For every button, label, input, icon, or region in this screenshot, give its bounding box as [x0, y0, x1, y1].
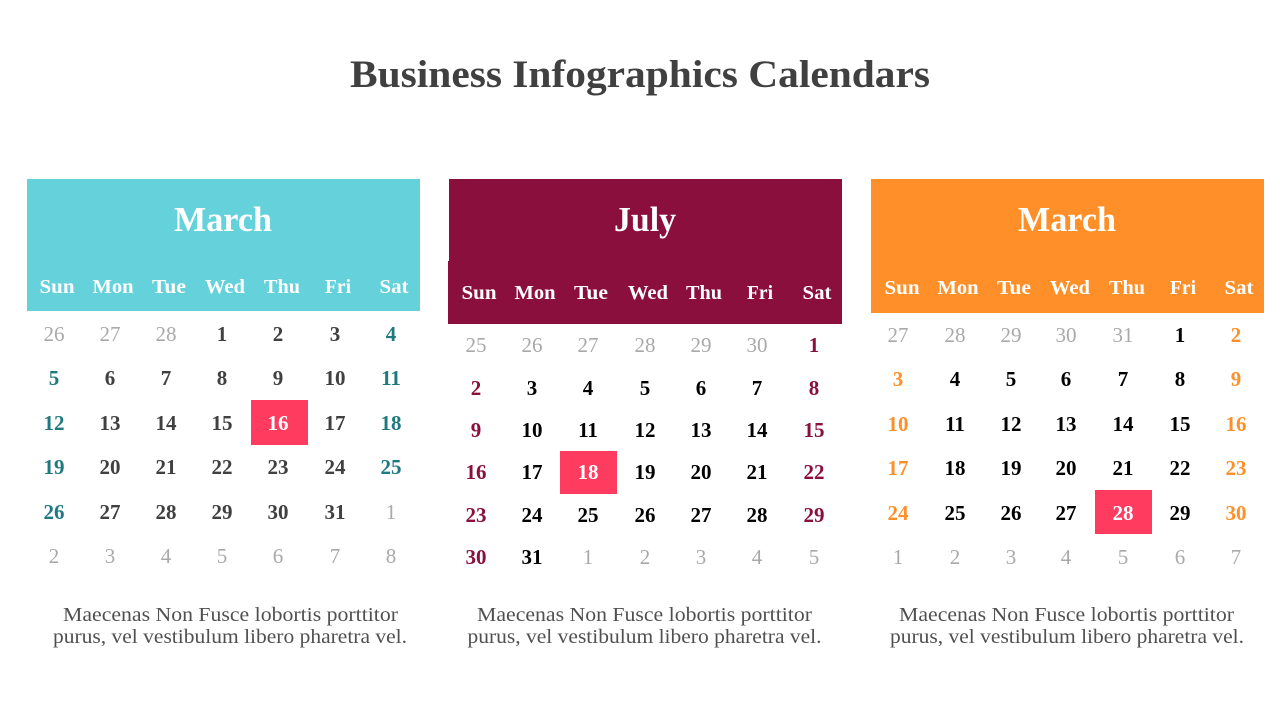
date grid: 7: [161, 366, 171, 390]
date grid: 5: [809, 545, 819, 569]
weekday labels: Sat: [802, 282, 832, 304]
date grid: 3: [1006, 545, 1016, 569]
date grid: 5: [1118, 545, 1128, 569]
date grid: 14: [1112, 412, 1134, 436]
date grid: 2: [471, 376, 481, 400]
date grid: 21: [746, 460, 768, 484]
date grid: 19: [44, 455, 64, 479]
date grid: 7: [1118, 367, 1128, 391]
date grid: 11: [381, 366, 401, 390]
date grid: 29: [1170, 501, 1190, 525]
date grid: 19: [634, 460, 656, 484]
date grid: 1: [217, 322, 227, 346]
date grid: 20: [100, 455, 120, 479]
date grid: 4: [386, 322, 397, 346]
date grid: 5: [49, 366, 59, 390]
date grid: 28: [156, 500, 176, 524]
caption: [53, 604, 407, 648]
date grid: 4: [583, 376, 594, 400]
date grid: 8: [1175, 367, 1185, 391]
date grid: 3: [893, 367, 903, 391]
date grid: 13: [690, 418, 712, 442]
date grid: 6: [1061, 367, 1071, 391]
date grid: 27: [690, 503, 712, 527]
panel: orange March calendar: [871, 179, 1264, 648]
weekday labels: Tue: [152, 276, 186, 298]
date grid: 27: [100, 500, 120, 524]
date grid: 25: [944, 501, 966, 525]
date grid: 28: [944, 323, 966, 347]
date grid: 4: [1061, 545, 1072, 569]
date grid: 6: [1175, 545, 1185, 569]
weekday labels: Mon: [92, 276, 134, 298]
month heading: March: [1018, 200, 1116, 239]
date grid: 23: [1226, 456, 1246, 480]
date grid: 27: [1056, 501, 1076, 525]
date grid: 14: [746, 418, 768, 442]
date grid: 24: [522, 503, 543, 527]
date grid: 3: [696, 545, 706, 569]
date grid: 18: [380, 411, 402, 435]
weekday labels: Wed: [1050, 277, 1090, 299]
date grid: 13: [1056, 412, 1076, 436]
weekday labels: Wed: [628, 282, 668, 304]
date grid: 3: [330, 322, 340, 346]
date grid: 1: [386, 500, 396, 524]
date grid: 14: [156, 411, 177, 435]
weekday labels: Tue: [997, 277, 1031, 299]
date grid: 30: [746, 333, 768, 357]
month heading: July: [614, 200, 676, 239]
date grid: 29: [804, 503, 824, 527]
date grid: 24: [888, 501, 909, 525]
date grid: 15: [212, 411, 232, 435]
date grid: 1: [1175, 323, 1185, 347]
weekday labels: [884, 277, 1254, 299]
date grid: [44, 322, 402, 568]
caption: purus, vel vestibulum libero pharetra vel.: [53, 626, 407, 648]
date grid: 10: [324, 366, 346, 390]
date grid: 8: [809, 376, 819, 400]
date grid: 15: [1170, 412, 1190, 436]
date grid: 3: [105, 544, 115, 568]
date grid: 25: [578, 503, 598, 527]
date grid: 10: [888, 412, 908, 436]
date grid: 10: [522, 418, 542, 442]
date grid: 17: [324, 411, 346, 435]
date grid: 9: [273, 366, 283, 390]
date grid: 2: [640, 545, 650, 569]
date grid: 22: [212, 455, 232, 479]
weekday labels: Sun: [462, 282, 496, 304]
date grid: 11: [578, 418, 598, 442]
date grid: 12: [634, 418, 656, 442]
date grid: 7: [752, 376, 762, 400]
date grid: 1: [893, 545, 903, 569]
date grid: 28: [746, 503, 768, 527]
date grid: 26: [44, 322, 64, 346]
date grid: 7: [330, 544, 340, 568]
date grid: 26: [634, 503, 656, 527]
date grid: 3: [527, 376, 537, 400]
date grid: 30: [1056, 323, 1076, 347]
date grid: 13: [100, 411, 120, 435]
date grid: 2: [1231, 323, 1241, 347]
date grid: 27: [578, 333, 598, 357]
date grid: 26: [44, 500, 64, 524]
date grid: 17: [888, 456, 908, 480]
panel: teal March calendar: [27, 179, 420, 648]
weekday labels: Wed: [205, 276, 245, 298]
header band: [871, 179, 1264, 313]
date grid: 23: [268, 455, 288, 479]
date grid: 30: [268, 500, 288, 524]
date grid: 1: [583, 545, 593, 569]
date grid: 12: [44, 411, 64, 435]
date grid: 30: [1226, 501, 1246, 525]
date grid: 30: [466, 545, 486, 569]
date grid: 31: [522, 545, 542, 569]
date grid: 26: [1000, 501, 1022, 525]
date grid: 16: [268, 411, 288, 435]
date grid: 20: [1056, 456, 1076, 480]
panel: maroon July calendar: [448, 179, 842, 648]
caption: [468, 604, 822, 648]
date grid: 12: [1000, 412, 1022, 436]
date grid: 15: [804, 418, 824, 442]
caption: Maecenas Non Fusce lobortis porttitor: [63, 604, 398, 626]
date grid: 2: [950, 545, 960, 569]
weekday labels: Fri: [325, 276, 351, 298]
date grid: 16: [1226, 412, 1246, 436]
title: Business Infographics Calendars: [350, 53, 930, 96]
date grid: 5: [1006, 367, 1016, 391]
date grid: 18: [944, 456, 966, 480]
weekday labels: Sun: [884, 277, 920, 299]
highlighted date box: [560, 451, 617, 494]
date grid: [888, 323, 1246, 569]
weekday labels: Fri: [747, 282, 773, 304]
date grid: 9: [1231, 367, 1241, 391]
date grid: 6: [273, 544, 283, 568]
date grid: 26: [522, 333, 542, 357]
date grid: 5: [640, 376, 650, 400]
date grid: 5: [217, 544, 227, 568]
highlighted date box: [1095, 490, 1152, 534]
date grid: 29: [212, 500, 232, 524]
highlighted date box: [251, 400, 308, 445]
date grid: 11: [945, 412, 965, 436]
date grid: 2: [273, 322, 283, 346]
date grid: 31: [1112, 323, 1134, 347]
date grid: 27: [888, 323, 908, 347]
date grid: 28: [634, 333, 656, 357]
weekday labels: [40, 276, 409, 298]
date grid: 31: [324, 500, 346, 524]
weekday labels: Sat: [1224, 277, 1254, 299]
caption: Maecenas Non Fusce lobortis porttitor: [899, 604, 1234, 626]
weekday labels: Fri: [1170, 277, 1196, 299]
date grid: 4: [161, 544, 172, 568]
date grid: 6: [105, 366, 115, 390]
header band: [27, 179, 420, 311]
date grid: 24: [324, 455, 346, 479]
weekday labels: [462, 282, 832, 304]
date grid: 25: [380, 455, 402, 479]
date grid: 9: [471, 418, 481, 442]
caption: purus, vel vestibulum libero pharetra vel.: [468, 626, 822, 648]
date grid: 4: [752, 545, 763, 569]
weekday labels: Thu: [264, 276, 300, 298]
date grid: 4: [950, 367, 961, 391]
date grid: 8: [386, 544, 396, 568]
date grid: 28: [156, 322, 176, 346]
date grid: 28: [1112, 501, 1134, 525]
date grid: 29: [690, 333, 712, 357]
date grid: 17: [522, 460, 542, 484]
caption: [890, 604, 1244, 648]
date grid: 25: [466, 333, 486, 357]
date grid: 8: [217, 366, 227, 390]
caption: Maecenas Non Fusce lobortis porttitor: [477, 604, 812, 626]
date grid: 27: [100, 322, 120, 346]
date grid: 22: [804, 460, 824, 484]
date grid: 1: [809, 333, 819, 357]
weekday labels: Thu: [686, 282, 722, 304]
weekday labels: Mon: [514, 282, 556, 304]
weekday labels: Thu: [1109, 277, 1145, 299]
date grid: 20: [690, 460, 712, 484]
date grid: 21: [1112, 456, 1134, 480]
date grid: 2: [49, 544, 59, 568]
date grid: 7: [1231, 545, 1241, 569]
date grid: 29: [1000, 323, 1022, 347]
date grid: 6: [696, 376, 706, 400]
date grid: 16: [466, 460, 486, 484]
header band: [448, 179, 842, 324]
weekday labels: Tue: [574, 282, 608, 304]
month heading: March: [174, 200, 272, 239]
weekday labels: Sun: [40, 276, 74, 298]
date grid: 19: [1000, 456, 1022, 480]
weekday labels: Sat: [380, 276, 409, 298]
weekday labels: Mon: [938, 277, 978, 299]
caption: purus, vel vestibulum libero pharetra vel.: [890, 626, 1244, 648]
date grid: 21: [156, 455, 176, 479]
date grid: [466, 333, 824, 569]
date grid: 22: [1170, 456, 1190, 480]
date grid: 23: [466, 503, 486, 527]
date grid: 18: [578, 460, 598, 484]
